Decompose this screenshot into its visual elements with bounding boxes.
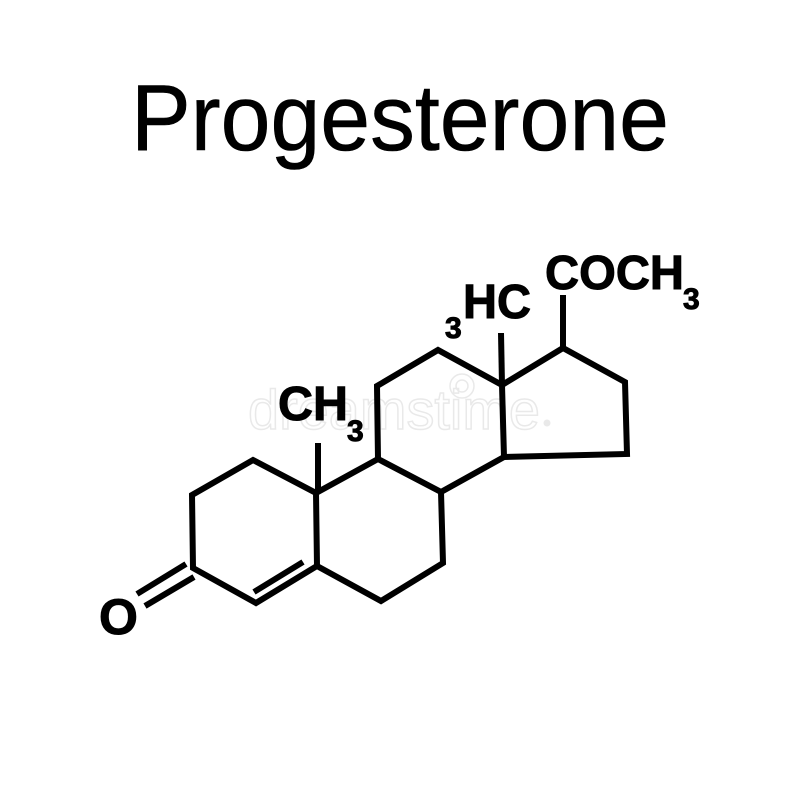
title: Progesterone [131,65,669,170]
label: oxygen: O [99,589,138,645]
label: H3C [445,276,531,345]
label: H3C: 3 [445,312,462,345]
label: CH3 [278,378,364,448]
molecule skeleton [137,295,627,606]
label: COCH3: 3 [683,283,700,316]
label: CH3: CH [278,378,348,431]
watermark: dreamstime [248,378,540,441]
label: H3C: HC [463,276,531,329]
label: COCH3: COCH [545,247,684,300]
label: CH3: 3 [347,415,364,448]
